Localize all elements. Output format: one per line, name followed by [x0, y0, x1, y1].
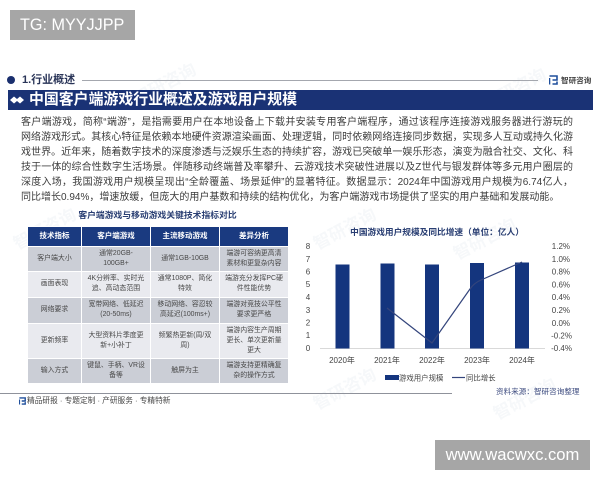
legend	[385, 374, 496, 382]
row: 客户端大小: 素材和更复杂内容	[226, 260, 282, 266]
left axis labels: 2	[306, 318, 311, 328]
table header: 客户端游戏	[97, 231, 135, 240]
row: 画面表现: 端游充分发挥PC硬	[225, 275, 283, 282]
section heading text: 1.行业概述	[22, 74, 75, 86]
row: 更新频率: 频繁热更新(周/双	[159, 332, 211, 338]
body paragraph: 技于一体的综合性数字生活场景。伴随移动终端普及率攀升、云游戏技术突破性进展以及Z世代与银发群体等多元用户圈层的	[21, 162, 573, 173]
table title: 客户端游戏与移动游戏关键技术指标对比	[78, 210, 237, 220]
row: 画面表现: 特效	[178, 285, 192, 292]
table header: 主流移动游戏	[162, 231, 208, 240]
left axis labels: 1	[306, 331, 311, 340]
left axis labels: 3	[306, 306, 311, 315]
row: 输入方式: 键鼠、手柄、VR设	[87, 362, 145, 368]
x axis labels: 2020年	[329, 355, 355, 365]
watermark badge: website	[435, 440, 590, 470]
row: 输入方式: 杂的操作方式	[233, 372, 275, 378]
row: 网络要求: 要求更严格	[237, 311, 271, 318]
right axis labels: -0.4%	[551, 344, 572, 353]
legend: 游戏用户规模	[399, 374, 444, 382]
right axis labels	[551, 242, 572, 353]
row: 客户端大小	[28, 247, 288, 271]
body paragraph: 网络游戏形式。其核心特征是依赖本地硬件资源渲染画面、处理逻辑，同时依赖网络连接同步数据，实现多人互动或持久化游	[21, 132, 573, 143]
icon: footer logo	[19, 397, 26, 405]
row: 网络要求: 移动网络、容忍较	[157, 301, 213, 308]
text: 智研咨询	[10, 205, 79, 254]
logo text: 智研咨询	[561, 76, 591, 85]
body paragraph: 客户端游戏，简称“端游”，是指需要用户在本地设备上下载并安装专用客户端程序，通过该程序连接游戏服务器进行游玩的	[21, 117, 573, 128]
left axis labels: 6	[306, 268, 311, 276]
left axis labels: 8	[306, 242, 311, 251]
text: 智研咨询	[130, 60, 199, 109]
comparison table	[27, 226, 288, 383]
watermark badge: website: www.wacwxc.com	[446, 445, 579, 464]
title banner	[8, 90, 593, 110]
table header	[28, 227, 288, 383]
right axis labels: 0.4%	[552, 293, 570, 302]
legend: 同比增长	[466, 374, 496, 382]
right axis labels: -0.2%	[551, 332, 572, 340]
row: 画面表现: 件性能优势	[237, 285, 271, 292]
right axis labels: 1.2%	[552, 242, 570, 251]
right axis labels: 0.8%	[552, 268, 570, 276]
watermark badge: TG: TG: MYYJJPP	[20, 16, 124, 34]
section heading: 1.行业概述	[7, 74, 75, 86]
table header: 技术指标	[40, 231, 70, 240]
row: 客户端大小: 客户端大小	[37, 254, 72, 262]
row: 输入方式: 端游支持更精确复	[226, 362, 282, 368]
row: 网络要求: (20-50ms)	[100, 311, 132, 318]
text: 智研咨询	[450, 215, 519, 264]
footer slogan	[19, 396, 170, 405]
row: 客户端大小: 端游可容纳更高清	[226, 250, 282, 256]
body paragraph	[21, 116, 573, 203]
bars: user scale	[336, 262, 529, 348]
row: 网络要求: 高延迟(100ms+)	[160, 311, 210, 318]
text: 智研咨询	[310, 365, 379, 414]
icon: section bullet	[7, 76, 15, 84]
right axis labels: 0.2%	[552, 306, 570, 315]
chart title: 中国游戏用户规模及同比增速（单位：亿人）	[350, 226, 524, 237]
row: 画面表现: 追、高动态范围	[92, 285, 140, 292]
x axis labels	[329, 355, 535, 365]
body paragraph: 深度入场，我国游戏用户规模呈现出“全龄覆盖、场景延伸”的显著特征。数据显示：2024年中国游戏用户规模为6.74亿人，	[21, 177, 573, 188]
row: 输入方式: 备等	[109, 372, 123, 378]
row: 更新频率: 更新频率	[41, 336, 68, 344]
combo chart: 游戏用户规模及同比增速	[306, 226, 572, 382]
left axis labels: 7	[306, 255, 311, 264]
left axis labels	[306, 242, 311, 353]
row: 更新频率: 端游内容生产周期	[226, 326, 282, 334]
right axis labels: 0.0%	[552, 319, 570, 328]
footer text: 精品研报 · 专题定制 · 产研服务 · 专精特新	[27, 396, 170, 405]
row: 更新频率: 更长、单次更新量	[226, 336, 282, 344]
title text: 中国客户端游戏行业概述及游戏用户规模	[29, 92, 297, 108]
row: 客户端大小: 100GB+	[103, 260, 129, 266]
x axis labels: 2024年	[509, 355, 535, 365]
icon: diamond	[10, 96, 24, 104]
left axis labels: 4	[306, 293, 311, 302]
icon: logo mark	[549, 75, 558, 85]
row: 网络要求: 端游对竞技公平性	[226, 301, 282, 308]
row: 网络要求: 宽带网络、低延迟	[88, 301, 144, 308]
row: 画面表现: 通常1080P、简化	[158, 275, 212, 282]
left axis labels: 5	[306, 280, 311, 289]
row: 更新频率: 大型资料片季度更	[88, 332, 144, 338]
row: 输入方式	[28, 359, 288, 383]
x axis labels: 2022年	[419, 355, 445, 365]
table header: 差异分析	[239, 231, 269, 240]
row: 更新频率	[28, 324, 288, 358]
x axis labels: 2021年	[374, 355, 400, 365]
row: 客户端大小: 通常20GB-	[99, 250, 133, 256]
line: yoy growth	[387, 262, 522, 343]
source note: 资料来源：智研咨询整理	[496, 387, 580, 396]
row: 更新频率: 更大	[247, 346, 261, 354]
row: 画面表现: 画面表现	[41, 280, 68, 287]
watermark badge: TG	[10, 10, 135, 40]
row: 更新频率: 新+小补丁	[100, 342, 132, 348]
row: 网络要求	[28, 298, 288, 323]
row: 画面表现: 4K分辨率、实时光	[88, 275, 144, 282]
row: 输入方式: 触屏为主	[171, 366, 199, 374]
left axis labels: 0	[306, 344, 311, 353]
text: 智研咨询	[480, 65, 549, 114]
body paragraph: 戏世界。近年来，随着数字技术的深度渗透与泛娱乐生态的持续扩容，游戏已突破单一娱乐形态，演变为融合社交、文化、科	[21, 147, 573, 158]
right axis labels: 1.0%	[552, 255, 570, 264]
row: 画面表现	[28, 272, 288, 297]
logo: 智研咨询	[549, 75, 591, 85]
right axis labels: 0.6%	[552, 280, 570, 290]
body paragraph: 同比增长0.94%，增速放缓，但庞大的用户基数和持续的结构优化，为客户端游戏市场提供了坚实的用户基础和发展动能。	[21, 192, 559, 203]
row: 更新频率: 周)	[180, 342, 190, 348]
text: 智研咨询	[310, 205, 379, 254]
row: 网络要求: 网络要求	[41, 306, 68, 313]
x axis labels: 2023年	[464, 355, 490, 365]
row: 输入方式: 输入方式	[41, 366, 68, 374]
row: 客户端大小: 通常1GB-10GB	[161, 254, 209, 262]
text: 智研咨询	[490, 375, 559, 424]
